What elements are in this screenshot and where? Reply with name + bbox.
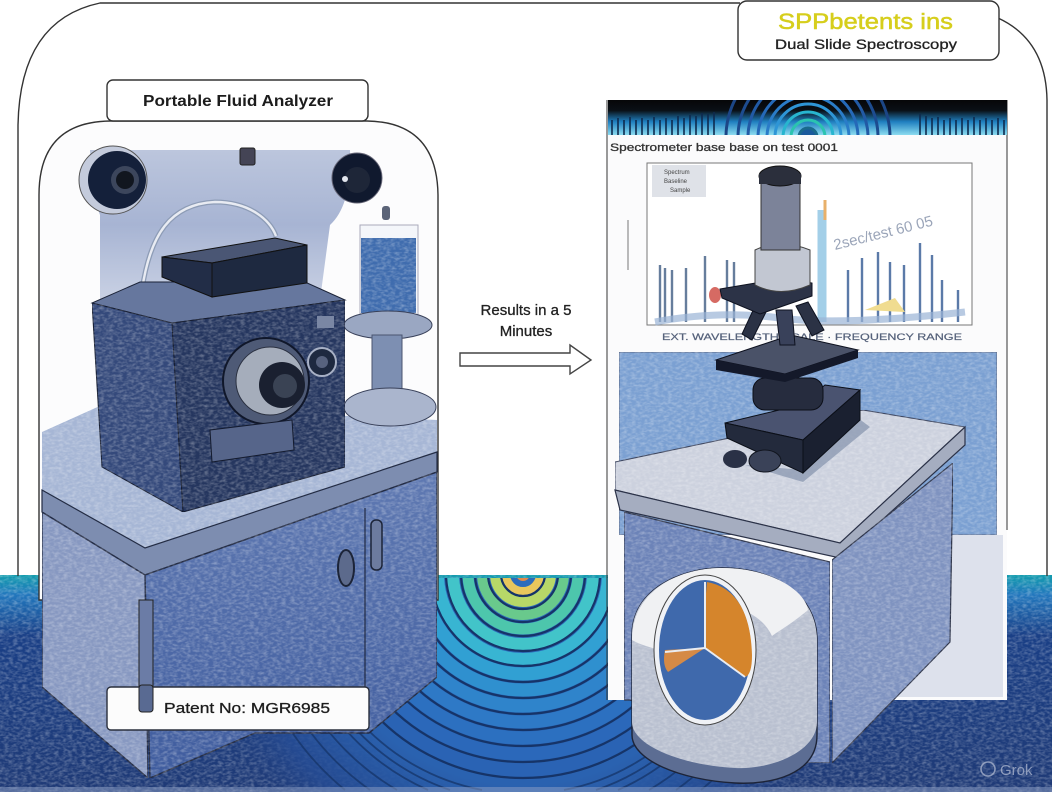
spectrum chart: [628, 163, 972, 325]
heading: portable fluid analyzer: Portable Fluid Analyzer: [143, 93, 333, 110]
watermark: Grok: Grok: [1000, 762, 1033, 779]
wall backdrop: [90, 150, 350, 300]
chart overlay label: 2sec/test 60 05: [832, 213, 935, 254]
focus block: [753, 378, 823, 410]
beaker on stand: [344, 206, 436, 426]
ripple rings: [397, 578, 631, 760]
icon: door handle: [371, 520, 382, 570]
arm: [720, 278, 812, 314]
tube: [761, 180, 800, 250]
icon: lens: [223, 338, 309, 424]
chart footer text: EXT. WAVELENGTH SCALE · FREQUENCY RANGE: [662, 332, 962, 342]
icon: right wall speaker: [332, 153, 382, 203]
callout title: SPPbetents ins: [778, 9, 953, 34]
microscope: [716, 166, 870, 482]
chart legend: [652, 165, 706, 197]
spectrum band: [608, 100, 1007, 135]
panel backing: [608, 100, 1007, 700]
lower right wall: [895, 535, 1003, 697]
panel background: [39, 121, 438, 600]
cabinet front: [145, 472, 437, 778]
cabinet left side: [42, 512, 148, 778]
arrow caption: Minutes: [500, 323, 552, 340]
watermark: Grok: [981, 762, 1033, 779]
nameplate: [210, 420, 294, 462]
cabinet right side: [832, 463, 953, 763]
table top right: [615, 410, 965, 543]
outer rounded frame: [18, 3, 1047, 576]
chart legend: Sample: [670, 188, 691, 194]
top small badge: [317, 316, 334, 328]
cabinet door line: [364, 508, 366, 715]
arrow caption: Results in a 5: [481, 302, 571, 319]
callout: spectroscopy heading: [738, 1, 999, 60]
cabinet right front: [624, 512, 830, 763]
blue backdrop: [619, 352, 997, 535]
panel: spectroscopy results: [607, 55, 1007, 783]
icon: wall badge: [240, 148, 255, 165]
top module: [162, 238, 307, 263]
analyzer top: [92, 282, 345, 323]
icon: arrow: [460, 345, 591, 374]
table top left: [42, 405, 437, 548]
chart y axis: [627, 220, 629, 270]
cylinder with pie chart: [632, 568, 817, 783]
icon: dial: [308, 348, 336, 376]
chart title: Spectrometer base base on test 0001: [610, 142, 838, 154]
analyzer left face: [92, 303, 183, 512]
stage: [716, 335, 858, 374]
analyzer front face: [172, 300, 345, 512]
heading: portable fluid analyzer: [107, 80, 368, 121]
panel: portable fluid analyzer: [39, 121, 438, 778]
chart legend: Spectrum: [664, 170, 690, 176]
callout subtitle: Dual Slide Spectroscopy: [775, 36, 957, 52]
arrow with caption: [460, 302, 591, 374]
icon: door lock: [338, 550, 354, 586]
ripple separators: [292, 578, 712, 791]
cabinet leg post: [139, 600, 153, 713]
label: patent number: [107, 685, 369, 730]
pie chart: [654, 575, 756, 725]
label: patent number: Patent No: MGR6985: [164, 700, 330, 717]
objectives: [742, 304, 768, 340]
collar: [755, 244, 810, 292]
chart peaks: [655, 200, 965, 322]
table shadow: [745, 418, 870, 482]
tubing: [142, 202, 276, 290]
floor band with concentric ripples: [0, 575, 1052, 792]
microscope base: [725, 385, 860, 440]
icon: left wall speaker: [79, 146, 147, 214]
analyzer device: [92, 238, 345, 512]
chart legend: Baseline: [664, 179, 688, 185]
